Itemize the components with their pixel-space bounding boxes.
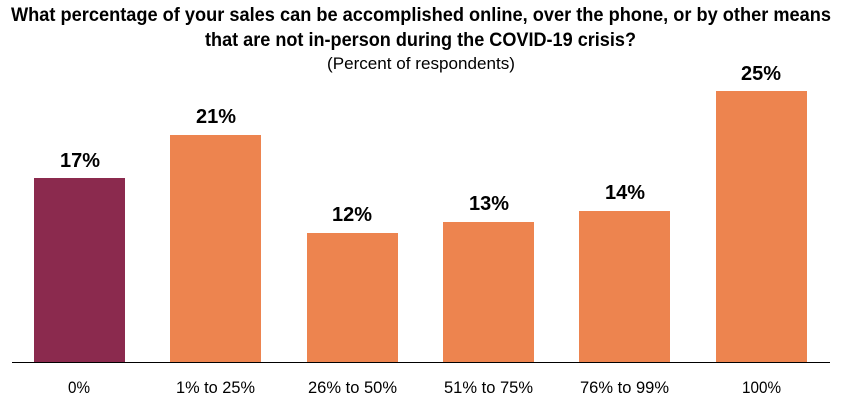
value labels: 12% <box>332 204 372 226</box>
value labels: 21% <box>196 106 236 128</box>
title: What percentage of your sales can be accomplished online, over the phone, or by other means <box>11 5 831 26</box>
value labels <box>60 63 781 226</box>
bar: 1% to 25% <box>170 135 261 362</box>
category labels: 26% to 50% <box>308 378 397 397</box>
value labels: 13% <box>469 193 509 215</box>
category labels <box>68 378 781 397</box>
bar: 76% to 99% <box>579 211 670 362</box>
title: that are not in-person during the COVID-19 crisis? <box>205 30 636 51</box>
category labels: 51% to 75% <box>444 378 533 397</box>
subtitle: (Percent of respondents) <box>327 54 515 73</box>
value labels: 17% <box>60 150 100 172</box>
value labels: 14% <box>605 182 645 204</box>
bar: 51% to 75% <box>443 222 534 362</box>
category labels: 76% to 99% <box>580 378 669 397</box>
category labels: 100% <box>742 378 781 397</box>
bar: 100% <box>716 91 807 362</box>
axis line <box>12 362 830 363</box>
category labels: 0% <box>68 378 90 397</box>
title <box>11 5 831 51</box>
value labels: 25% <box>741 63 781 85</box>
bar: 26% to 50% <box>307 233 398 362</box>
category labels: 1% to 25% <box>176 378 255 397</box>
bar: 0% <box>34 178 125 362</box>
